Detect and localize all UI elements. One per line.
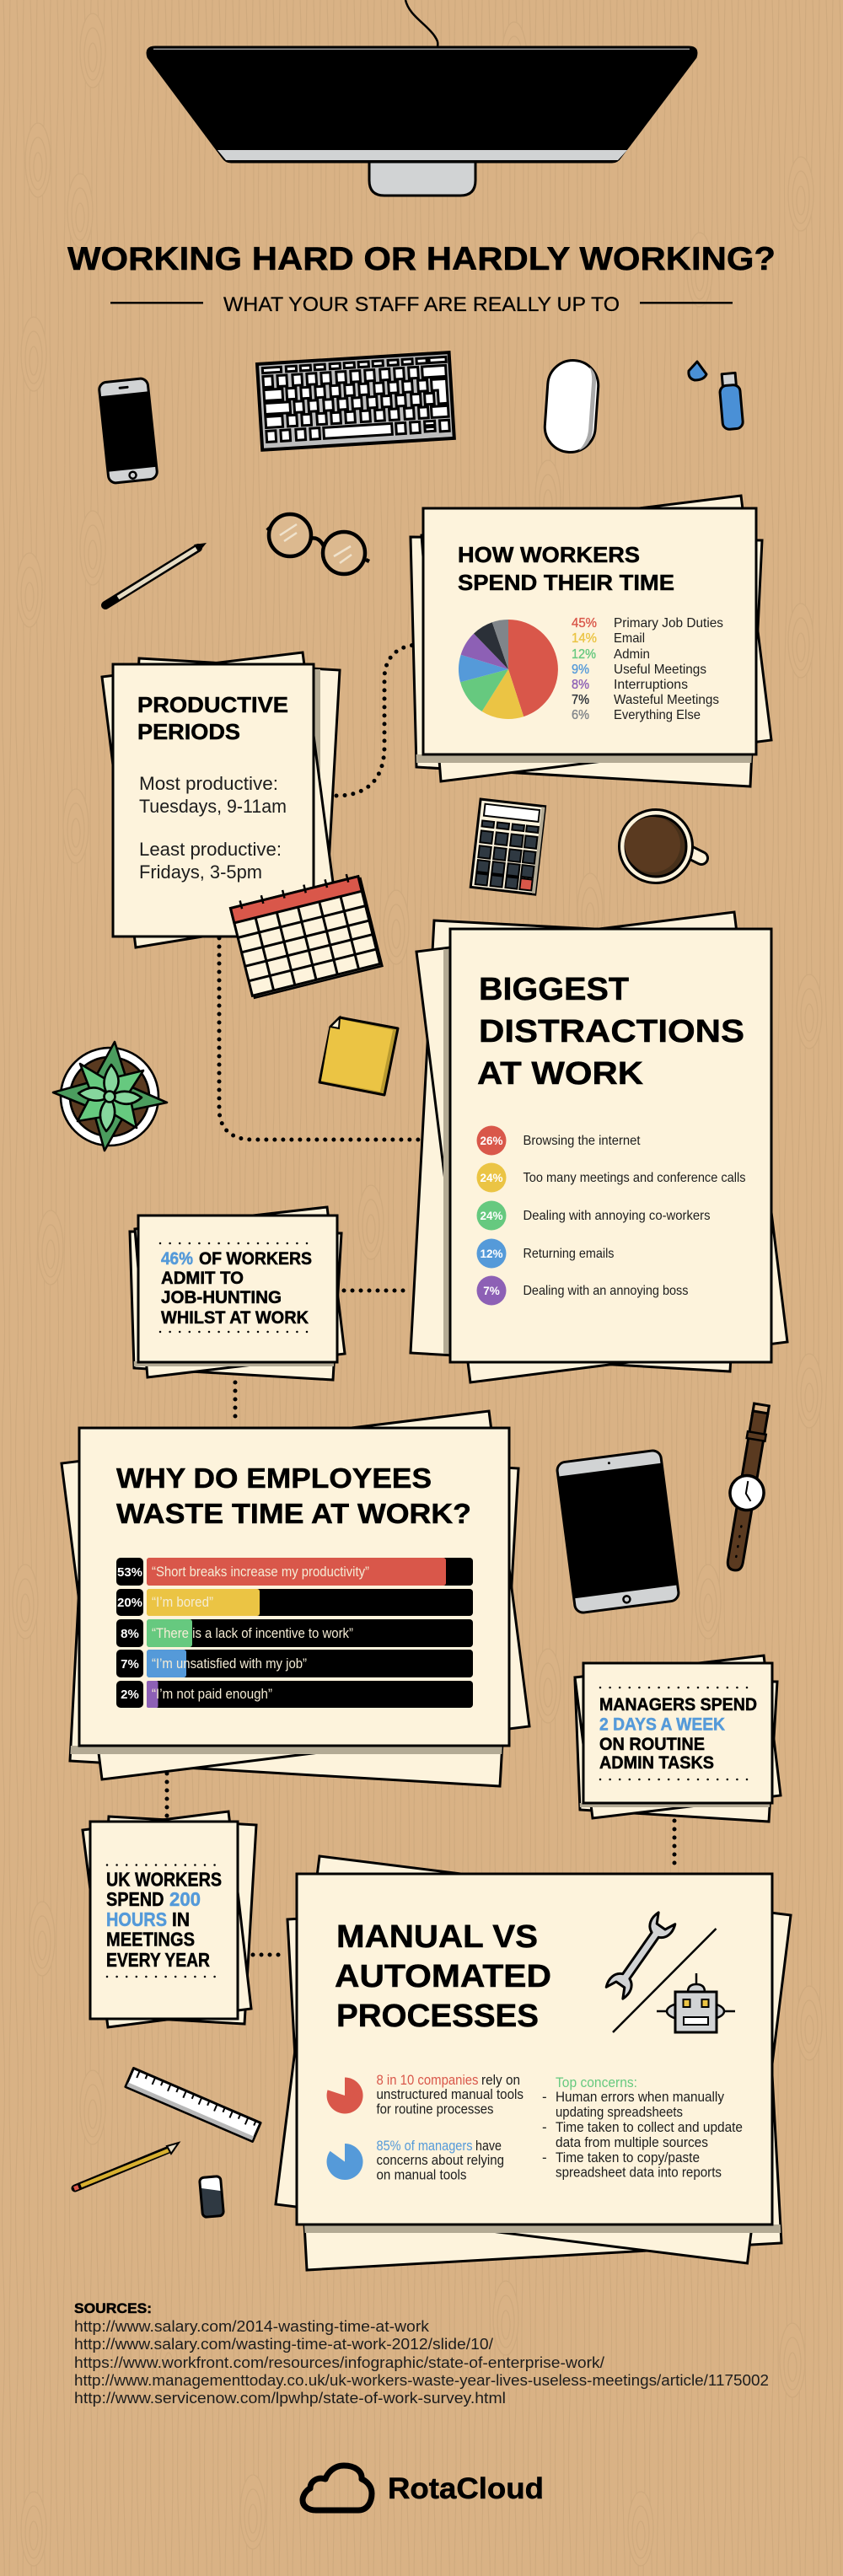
text: productive times: Fridays, 3-5pm	[139, 861, 262, 883]
heading: biggest distractions: DISTRACTIONS	[479, 1014, 744, 1049]
text: productive times: Most productive:	[139, 773, 278, 794]
icon: potted plant	[53, 1042, 167, 1151]
subtitle with rules: WHAT YOUR STAFF ARE REALLY UP TO	[223, 293, 620, 316]
pie legend: 45%	[572, 616, 597, 631]
heading: productive periods	[137, 692, 288, 744]
pie legend: Interruptions	[614, 678, 688, 692]
callout: managers admin tasks	[573, 1656, 784, 1822]
list: top concerns: -	[542, 2149, 547, 2165]
list: top concerns: Time taken to copy/paste	[556, 2149, 700, 2165]
text: uk workers stat: SPEND	[106, 1888, 164, 1910]
text: uk workers stat: UK WORKERS	[106, 1868, 222, 1890]
text: job hunting stat: OF WORKERS	[199, 1249, 312, 1269]
connector: job-hunting callout to distractions	[344, 1288, 410, 1293]
sources: http://www.servicenow.com/lpwhp/state-of-work-survey.html	[74, 2390, 506, 2407]
bar chart: “I’m bored”	[152, 1594, 213, 1610]
icon: computer monitor	[148, 47, 696, 196]
pie legend: Primary Job Duties	[614, 616, 723, 631]
list: top concerns	[542, 2074, 743, 2180]
text: uk workers stat: IN	[172, 1908, 190, 1930]
bar chart: 8%	[121, 1627, 139, 1641]
heading: biggest distractions: AT WORK	[477, 1056, 644, 1092]
icon: calculator	[470, 799, 545, 894]
list: distractions	[477, 1126, 745, 1305]
pie legend: 12%	[572, 647, 596, 662]
heading: why employees	[116, 1462, 471, 1529]
stat: 85% of managers: concerns about relying	[376, 2153, 504, 2168]
sources	[74, 2300, 769, 2407]
connector: uk workers to manual panel	[253, 1952, 287, 1957]
list: distractions: Returning emails	[523, 1247, 614, 1261]
pie legend: 7%	[572, 693, 589, 707]
list: top concerns: data from multiple sources	[556, 2134, 708, 2150]
heading: manual vs automated	[335, 1919, 551, 2034]
heading: how workers: SPEND THEIR TIME	[458, 570, 674, 595]
panel: how workers spend their time	[405, 496, 784, 786]
bar chart: 2%	[121, 1688, 139, 1702]
panel: manual vs automated processes	[276, 1856, 792, 2270]
bar chart: 53%	[117, 1565, 142, 1580]
icon: eraser	[199, 2176, 224, 2217]
text: managers stat: ON ROUTINE	[599, 1735, 705, 1754]
icon: wrench	[605, 1912, 676, 1999]
icon: monitor cable	[405, 0, 438, 47]
pie legend	[572, 616, 723, 722]
pie legend: 8%	[572, 678, 589, 692]
heading: why employees: WASTE TIME AT WORK?	[116, 1498, 471, 1529]
connector: productive periods to distractions	[219, 938, 419, 1140]
list: top concerns: Time taken to collect and update	[556, 2119, 743, 2135]
stat: 85% of managers: have	[475, 2139, 502, 2154]
text: uk workers stat	[106, 1868, 222, 1971]
stat: 8 in 10 companies: for routine processes	[376, 2102, 494, 2117]
list: distractions: Too many meetings and conference calls	[523, 1171, 745, 1185]
pie legend: 14%	[572, 631, 597, 646]
stat: 8 in 10 companies: rely on	[481, 2073, 520, 2088]
icon: coffee cup	[619, 809, 701, 883]
text: uk workers stat: HOURS	[106, 1908, 167, 1930]
sources: http://www.managementtoday.co.uk/uk-workers-waste-year-lives-useless-meetings/article/1175002	[74, 2372, 769, 2389]
list: top concerns: -	[542, 2119, 547, 2135]
logo: rotacloud: RotaCloud	[388, 2472, 544, 2505]
panel: biggest distractions at work	[411, 912, 787, 1382]
list: top concerns: -	[542, 2089, 547, 2105]
list: distractions: 12%	[480, 1248, 503, 1260]
connector: why employees to uk workers	[165, 1774, 169, 1817]
panel: productive periods	[102, 652, 340, 947]
pie legend: Everything Else	[614, 708, 701, 722]
text: uk workers stat: MEETINGS	[106, 1929, 195, 1951]
divider slash	[613, 1929, 717, 2032]
bar chart: “I’m unsatisfied with my job”	[152, 1656, 307, 1672]
bar chart	[116, 1558, 473, 1708]
sources: http://www.salary.com/wasting-time-at-work-2012/slide/10/	[74, 2336, 493, 2353]
text: job hunting stat	[161, 1249, 312, 1328]
callout: job hunting	[126, 1207, 354, 1380]
stat: 85% of managers	[327, 2139, 504, 2183]
stat: 85% of managers: on manual tools	[376, 2168, 467, 2183]
sources: https://www.workfront.com/resources/infographic/state-of-enterprise-work/	[74, 2354, 604, 2371]
list: distractions: 26%	[480, 1135, 503, 1147]
text: productive times	[139, 773, 287, 883]
list: distractions: Dealing with an annoying boss	[523, 1284, 688, 1298]
icon: pen	[105, 543, 207, 605]
heading: how workers	[458, 542, 674, 595]
icon: sticky note	[319, 1017, 398, 1095]
list: top concerns: Top concerns:	[556, 2074, 637, 2090]
bar chart: 7%	[121, 1657, 139, 1672]
pie legend: Useful Meetings	[614, 663, 706, 677]
logo: rotacloud	[303, 2466, 544, 2510]
heading: productive periods: PERIODS	[137, 719, 240, 744]
stat: 85% of managers: 85% of managers	[376, 2139, 472, 2154]
stat: 8 in 10 companies: unstructured manual tools	[376, 2087, 524, 2102]
heading: manual vs automated: MANUAL VS	[336, 1919, 538, 1955]
bar chart: “I’m not paid enough”	[152, 1686, 272, 1702]
text: managers stat	[599, 1695, 757, 1773]
text: productive times: Least productive:	[139, 839, 282, 860]
callout: uk workers meetings	[83, 1811, 256, 2027]
text: job hunting stat: 46%	[161, 1249, 193, 1269]
icon: wrist watch	[717, 1402, 778, 1573]
icon: tablet	[556, 1450, 679, 1613]
heading: productive periods: PRODUCTIVE	[137, 692, 288, 717]
bar chart: “Short breaks increase my productivity”	[152, 1564, 369, 1580]
text: managers stat: 2 DAYS A WEEK	[599, 1715, 725, 1735]
text: uk workers stat: EVERY YEAR	[106, 1949, 210, 1971]
panel: why do employees waste time	[62, 1411, 529, 1786]
icon: calendar	[229, 871, 382, 998]
heading: manual vs automated: PROCESSES	[336, 1999, 539, 2034]
list: distractions: Dealing with annoying co-workers	[523, 1209, 710, 1223]
pie legend: Email	[614, 631, 645, 646]
stat: 8 in 10 companies	[327, 2073, 524, 2117]
text: productive times: Tuesdays, 9-11am	[139, 796, 287, 817]
list: distractions: 7%	[483, 1285, 500, 1297]
list: top concerns: Human errors when manually	[556, 2089, 724, 2105]
text: job hunting stat: WHILST AT WORK	[161, 1308, 309, 1328]
connector: productive periods to how workers	[336, 645, 419, 796]
sources: http://www.salary.com/2014-wasting-time-at-work	[74, 2318, 430, 2335]
list: top concerns: updating spreadsheets	[556, 2104, 683, 2120]
heading: why employees: WHY DO EMPLOYEES	[116, 1462, 432, 1494]
connector: managers callout to manual panel	[673, 1821, 676, 1870]
sources: SOURCES:	[74, 2300, 152, 2316]
pie legend: Admin	[614, 647, 650, 662]
icon: usb stick	[689, 362, 744, 430]
icon: glasses	[267, 514, 369, 574]
bar chart: “There is a lack of incentive to work”	[152, 1625, 353, 1641]
text: job hunting stat: JOB-HUNTING	[161, 1288, 282, 1307]
icon: pencil	[74, 2143, 179, 2188]
pie chart	[459, 620, 558, 719]
pie legend: 6%	[572, 708, 589, 722]
list: top concerns: spreadsheet data into reports	[556, 2165, 722, 2180]
pie legend: Wasteful Meetings	[614, 693, 719, 707]
icon: keyboard	[257, 352, 454, 450]
icon: robot	[657, 1973, 735, 2032]
text: uk workers stat: 200	[169, 1888, 201, 1910]
list: distractions: 24%	[480, 1210, 503, 1222]
connector: job-hunting callout to why employees	[233, 1382, 238, 1423]
icon: ruler	[126, 2069, 260, 2141]
icon: computer mouse	[543, 359, 600, 453]
text: managers stat: ADMIN TASKS	[599, 1753, 714, 1773]
icon: smartphone	[99, 378, 158, 484]
stat: 8 in 10 companies: 8 in 10 companies	[376, 2073, 479, 2088]
list: distractions: Browsing the internet	[523, 1134, 641, 1148]
heading: how workers: HOW WORKERS	[458, 542, 640, 567]
pie legend: 9%	[572, 663, 589, 677]
text: job hunting stat: ADMIT TO	[161, 1269, 244, 1288]
list: distractions: 24%	[480, 1172, 503, 1184]
title: WORKING HARD OR HARDLY WORKING?	[67, 241, 776, 277]
heading: manual vs automated: AUTOMATED	[335, 1959, 551, 1994]
text: managers stat: MANAGERS SPEND	[599, 1695, 757, 1715]
heading: biggest distractions: BIGGEST	[479, 972, 629, 1007]
bar chart: 20%	[117, 1596, 142, 1610]
heading: biggest distractions	[477, 972, 744, 1092]
